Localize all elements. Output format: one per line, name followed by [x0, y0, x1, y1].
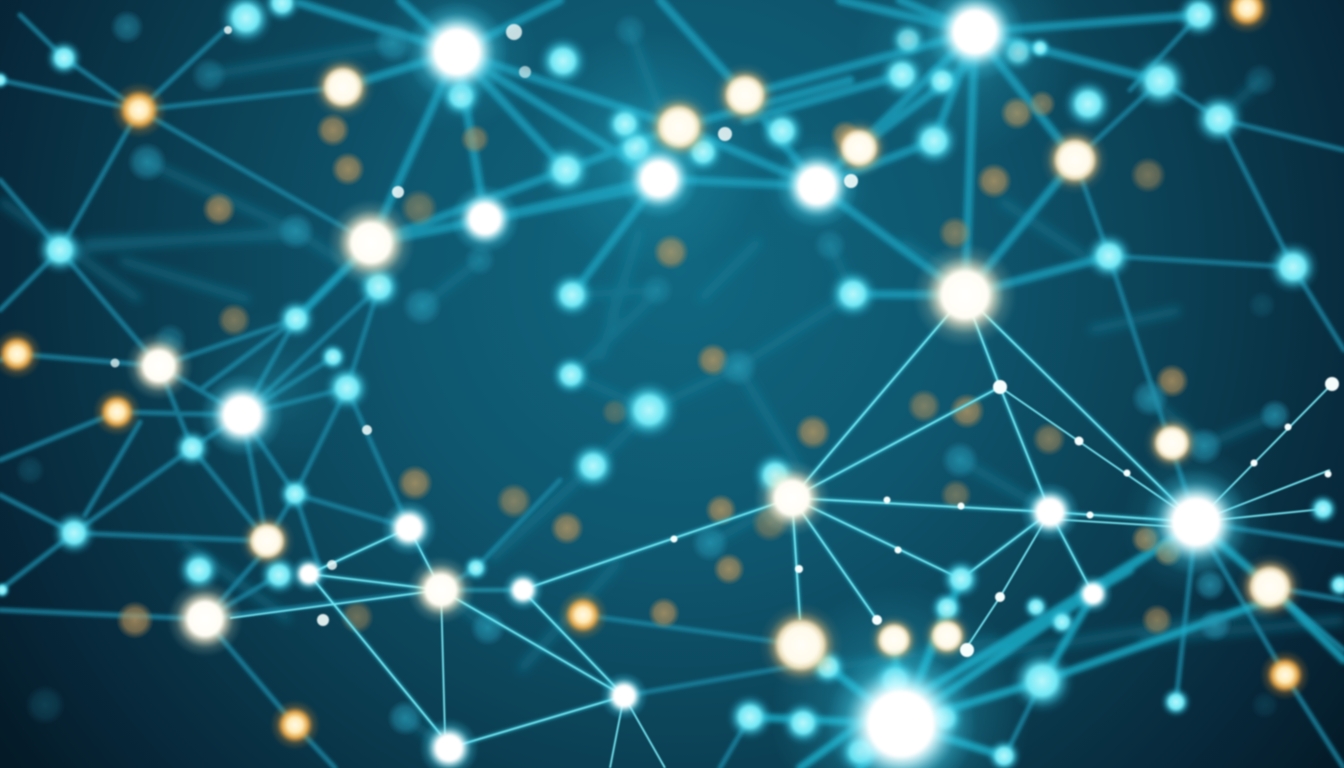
lower right thick edges: [750, 522, 1344, 768]
thin edge core: [230, 295, 1332, 768]
small junction dots: [110, 24, 1339, 657]
bright thin edges: [230, 295, 1332, 768]
thin edge glow: [309, 295, 1196, 748]
thick glowing edges: [296, 0, 1199, 319]
